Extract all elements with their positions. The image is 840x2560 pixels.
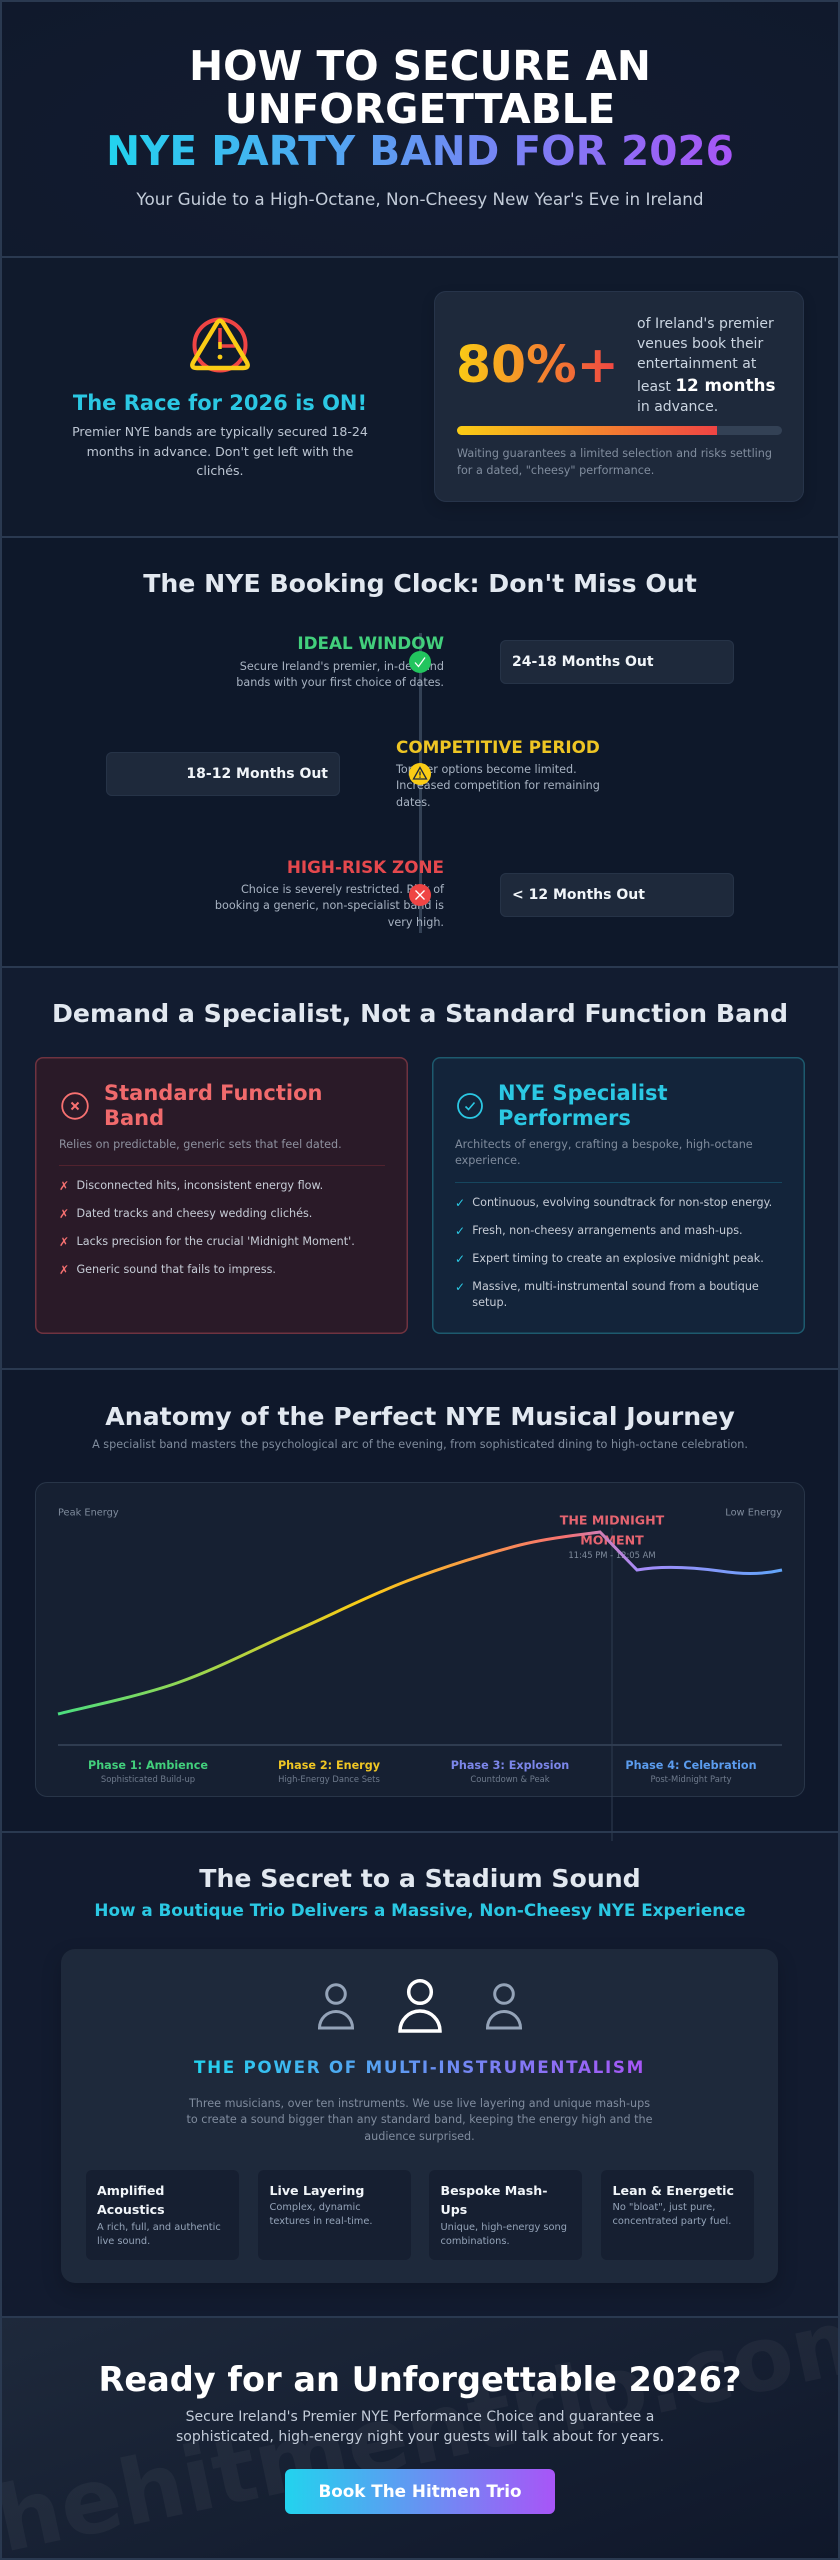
panel: energy chart background (35, 1482, 805, 1797)
timeline text: competitive period (396, 737, 600, 809)
pill: 24-18 months: 24-18 Months Out (512, 654, 654, 670)
heading: The NYE Booking Clock: Don't Miss Out (143, 569, 697, 598)
progress bar (457, 426, 782, 435)
list: benefits: setup. (472, 1296, 507, 1309)
panel title (498, 1080, 668, 1130)
card: live layering: textures in real-time. (270, 2216, 372, 2226)
text: race description (72, 424, 368, 478)
panel title: Performers (498, 1106, 631, 1130)
card: bespoke mash-ups (429, 2170, 582, 2260)
text: sophisticated, high-energy night your guests will talk about for years. (176, 2429, 664, 2445)
pill: 18-12 months (106, 752, 340, 796)
button: Book The Hitmen Trio (318, 2481, 522, 2501)
axis label: peak: Peak Energy (58, 1507, 119, 1518)
panel title: Band (104, 1106, 164, 1130)
stat note: for a dated, "cheesy" performance. (457, 464, 654, 477)
card: lean and energetic (601, 2170, 754, 2260)
list: benefits: Fresh, non-cheesy arrangements and mash-ups. (472, 1224, 743, 1236)
panel: standard function band (35, 1057, 408, 1334)
icon: cross (409, 884, 431, 906)
pill: 18-12 months: 18-12 Months Out (186, 766, 328, 782)
list: benefits: Massive, multi-instrumental sound from a boutique (472, 1280, 759, 1292)
section: specialist comparison (0, 968, 840, 1370)
card: live layering: Live Layering (270, 2182, 364, 2198)
heading: the race: The Race for 2026 is ON! (73, 391, 367, 415)
callout: midnight moment: THE MIDNIGHT (560, 1512, 665, 1527)
card: lean and energetic: No "bloat", just pure, (612, 2202, 715, 2212)
heading: Ready for an Unforgettable 2026? (98, 2360, 742, 2399)
list: drawbacks: Lacks precision for the crucial 'Midnight Moment'. (76, 1234, 355, 1248)
text: race description: Premier NYE bands are typically secured 18-24 (72, 424, 368, 439)
card: bespoke mash-ups: Bespoke Mash- (440, 2182, 548, 2198)
panel: nye specialist performers (432, 1057, 805, 1334)
heading: Anatomy of the Perfect NYE Musical Journey (105, 1402, 735, 1431)
panel text: Three musicians, over ten instruments. We use live layering and unique mash-ups (189, 2097, 650, 2110)
stat number: 80%+ (456, 335, 619, 394)
pill: under 12 months: < 12 Months Out (512, 887, 645, 903)
section: stadium sound (0, 1833, 840, 2318)
list: drawbacks: ✗ (59, 1178, 69, 1192)
list: drawbacks: Disconnected hits, inconsistent energy flow. (76, 1178, 323, 1192)
panel subtitle: Architects of energy, crafting a bespoke, high-octane (455, 1138, 753, 1151)
stat note (457, 447, 772, 477)
icon: circled check (457, 1093, 483, 1119)
timeline text: competitive period: COMPETITIVE PERIOD (396, 737, 600, 757)
stat note: Waiting guarantees a limited selection and risks settling (457, 447, 772, 460)
panel: multi-instrumentalism (61, 1949, 778, 2283)
phase labels: High-Energy Dance Sets (278, 1774, 380, 1784)
curve line (58, 1532, 782, 1714)
timeline spine (418, 633, 422, 933)
panel subtitle: experience. (455, 1154, 521, 1167)
list: drawbacks: ✗ (59, 1206, 69, 1220)
text: race description: months in advance. Don't get left with the (87, 444, 353, 459)
list: benefits: ✓ (455, 1224, 465, 1238)
card: amplified acoustics: A rich, full, and authentic (97, 2222, 221, 2232)
card: bespoke mash-ups: Unique, high-energy song (440, 2222, 567, 2232)
button (285, 2469, 555, 2514)
icon: clock warning (190, 318, 250, 372)
icon: warning (409, 763, 431, 785)
phase labels: Post-Midnight Party (650, 1774, 732, 1784)
card: lean and energetic: concentrated party fuel. (612, 2216, 731, 2226)
panel text (186, 2097, 652, 2143)
timeline text: high-risk zone (215, 856, 444, 929)
panel title (104, 1080, 322, 1130)
stat text: entertainment at (637, 356, 756, 372)
subtitle: Your Guide to a High-Octane, Non-Cheesy New Year's Eve in Ireland (136, 189, 704, 209)
list: benefits (455, 1196, 772, 1309)
list: benefits: ✓ (455, 1280, 465, 1294)
panel title: Standard Function (104, 1080, 322, 1104)
list: benefits: Continuous, evolving soundtrack for non-stop energy. (472, 1196, 772, 1208)
phase labels: Phase 4: Celebration (625, 1759, 757, 1772)
panel heading: THE POWER OF MULTI-INSTRUMENTALISM (194, 2057, 645, 2077)
list: benefits: ✓ (455, 1196, 465, 1210)
panel text: audience surprised. (364, 2130, 475, 2143)
card: live layering: Complex, dynamic (270, 2202, 361, 2212)
panel: 80 percent stat (434, 291, 804, 502)
title: UNFORGETTABLE (225, 85, 615, 133)
card: amplified acoustics (86, 2170, 238, 2260)
list: drawbacks: Generic sound that fails to impress. (76, 1262, 276, 1276)
callout: midnight moment: 11:45 PM - 12:05 AM (568, 1550, 656, 1560)
panel text: to create a sound bigger than any standard band, keeping the energy high and the (187, 2113, 652, 2126)
heading: The Secret to a Stadium Sound (199, 1864, 641, 1893)
card: live layering (258, 2170, 411, 2260)
pill: 24-18 months (500, 640, 734, 684)
panel title: NYE Specialist (498, 1080, 668, 1104)
timeline text: ideal window: IDEAL WINDOW (297, 633, 444, 653)
timeline text: ideal window (236, 633, 444, 689)
list: drawbacks: ✗ (59, 1234, 69, 1248)
phase labels: Sophisticated Build-up (101, 1774, 195, 1784)
card: amplified acoustics: Amplified (97, 2182, 164, 2198)
list: benefits: Expert timing to create an explosive midnight peak. (472, 1252, 764, 1264)
panel subtitle (455, 1138, 753, 1167)
phase labels: Phase 1: Ambience (88, 1759, 208, 1772)
section: booking clock (0, 538, 840, 968)
timeline text: competitive period: Top-tier options become limited. (396, 763, 577, 776)
stat text: least 12 months (637, 375, 775, 395)
title: NYE PARTY BAND FOR 2026 (106, 127, 734, 175)
timeline text: high-risk zone: booking a generic, non-specialist band is (215, 899, 444, 912)
section: musical journey (0, 1370, 840, 1833)
phase labels: Phase 2: Energy (278, 1759, 381, 1772)
timeline text: competitive period: Increased competition for remaining (396, 779, 600, 792)
subheading: How a Boutique Trio Delivers a Massive, Non-Cheesy NYE Experience (94, 1900, 746, 1920)
icon: check (409, 651, 431, 673)
panel subtitle: Relies on predictable, generic sets that feel dated. (59, 1138, 342, 1151)
axis label: low: Low Energy (725, 1507, 782, 1518)
chart: energy curve (58, 1507, 782, 1841)
timeline text: ideal window: Secure Ireland's premier, in-demand (240, 660, 444, 672)
icon: three performers (318, 1979, 522, 2033)
phase labels (88, 1759, 757, 1784)
icon: circled x (61, 1092, 89, 1120)
phase labels: Phase 3: Explosion (451, 1759, 569, 1772)
list: drawbacks (59, 1178, 355, 1276)
section: call to action (0, 2318, 840, 2560)
stat text: of Ireland's premier (637, 316, 774, 332)
text: Secure Ireland's Premier NYE Performance Choice and guarantee a (186, 2409, 654, 2425)
section: race for 2026 (0, 258, 840, 538)
card: amplified acoustics: live sound. (97, 2236, 150, 2246)
card: bespoke mash-ups: Ups (440, 2202, 467, 2217)
timeline text: ideal window: bands with your first choice of dates. (236, 676, 444, 689)
list: drawbacks: Dated tracks and cheesy wedding clichés. (76, 1206, 312, 1220)
stat text: in advance. (637, 399, 718, 415)
timeline text: high-risk zone: very high. (388, 916, 444, 929)
title (106, 42, 734, 175)
card: amplified acoustics: Acoustics (97, 2202, 165, 2217)
card: bespoke mash-ups: combinations. (440, 2236, 510, 2246)
heading: Demand a Specialist, Not a Standard Function Band (52, 999, 788, 1028)
card: lean and energetic: Lean & Energetic (612, 2182, 734, 2198)
callout: midnight moment (560, 1512, 665, 1560)
section: header (0, 0, 840, 258)
stat text: venues book their (637, 336, 763, 352)
list: drawbacks: ✗ (59, 1262, 69, 1276)
callout: midnight moment: MOMENT (580, 1532, 644, 1547)
timeline text: high-risk zone: Choice is severely restricted. Risk of (241, 882, 444, 896)
text (176, 2409, 664, 2445)
subheading: A specialist band masters the psychological arc of the evening, from sophisticated dining to high-octane celebration. (92, 1438, 748, 1451)
pill: under 12 months (500, 873, 734, 917)
list: benefits: ✓ (455, 1252, 465, 1266)
title: HOW TO SECURE AN (189, 42, 651, 90)
timeline text: competitive period: dates. (396, 796, 431, 809)
timeline text: high-risk zone: HIGH-RISK ZONE (287, 856, 444, 876)
text: race description: clichés. (196, 463, 244, 478)
phase labels: Countdown & Peak (470, 1774, 550, 1784)
stat text (637, 316, 775, 415)
